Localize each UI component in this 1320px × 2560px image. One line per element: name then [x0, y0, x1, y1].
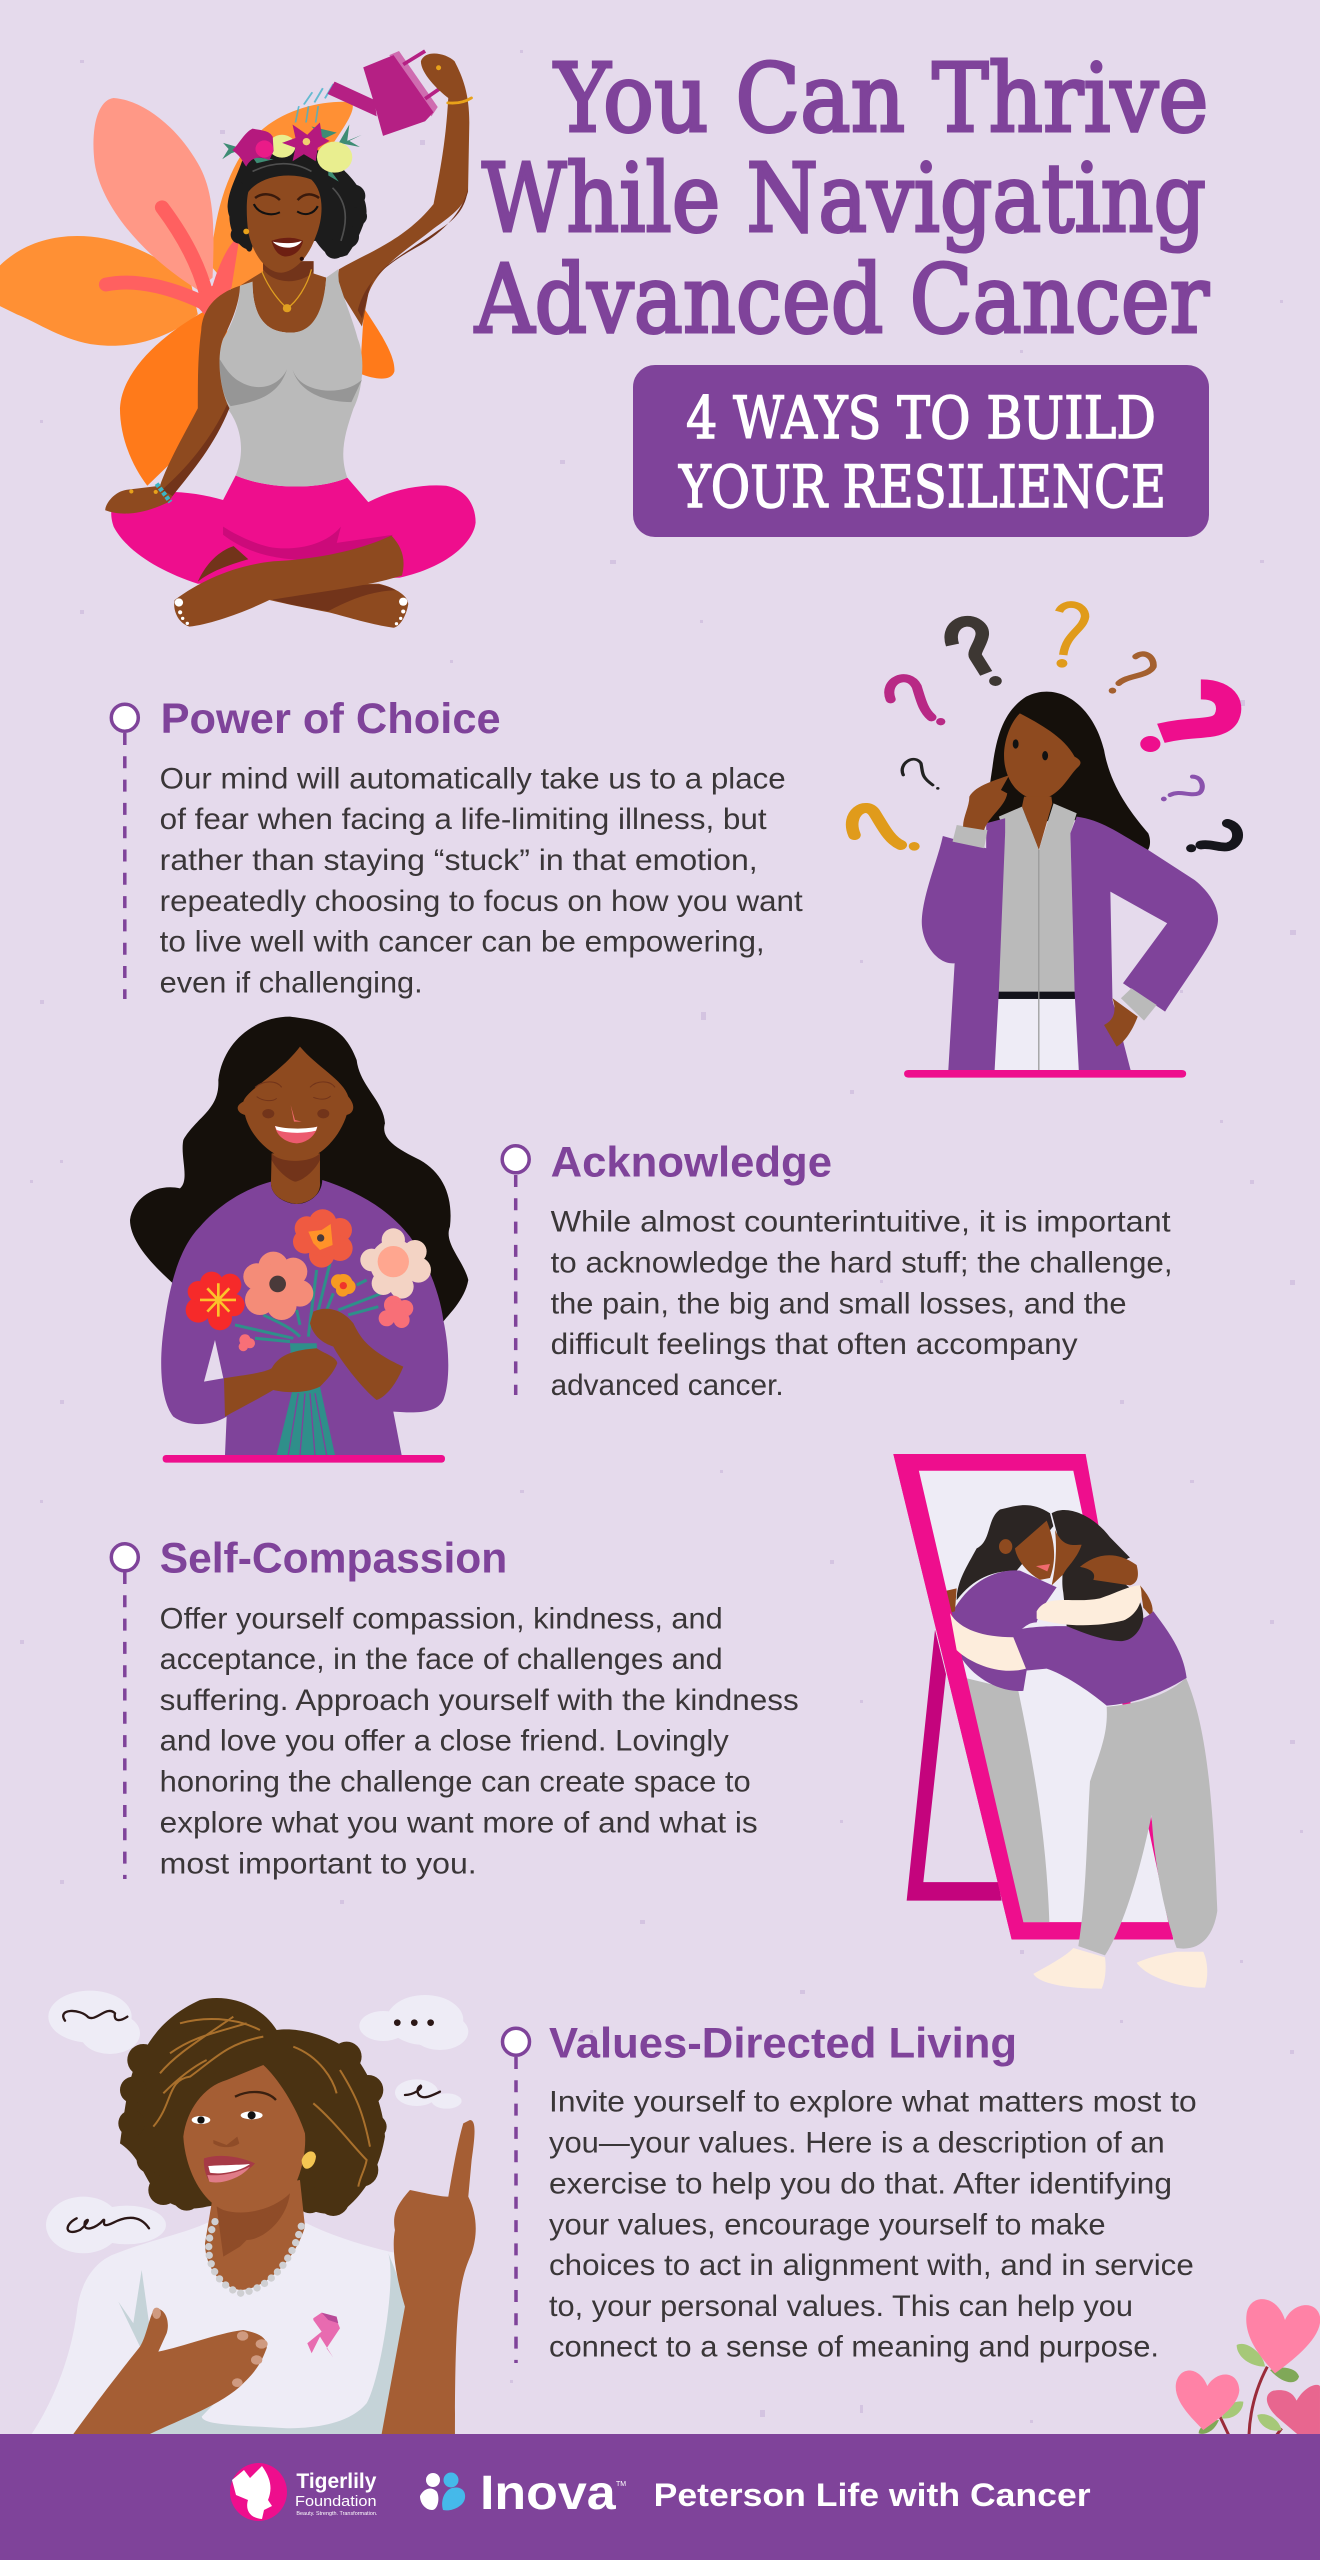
logo: Inova: Inova: [480, 2467, 616, 2520]
body text: to live well with cancer can be empowering,: [160, 926, 765, 959]
illustration: woman holding bouquet: [130, 1017, 468, 1463]
body text: exercise to help you do that. After identifying: [549, 2167, 1172, 2200]
body text: [160, 762, 803, 999]
logo: Tigerlily Foundation: [230, 2463, 377, 2521]
figure: [922, 692, 1218, 1070]
body text: advanced cancer.: [551, 1369, 784, 1402]
body text: Offer yourself compassion, kindness, and: [160, 1602, 723, 1635]
panel: self-compassion: [111, 1535, 799, 1880]
body text: While almost counterintuitive, it is important: [551, 1206, 1171, 1239]
body text: connect to a sense of meaning and purpose.: [549, 2331, 1159, 2364]
body text: rather than staying “stuck” in that emotion,: [160, 844, 758, 877]
logo: Tigerlily Foundation: Beauty. Strength. Transformation.: [296, 2511, 377, 2517]
body text: even if challenging.: [160, 966, 423, 999]
subtitle badge: YOUR RESILIENCE: [678, 453, 1166, 521]
base line: [904, 1070, 1186, 1078]
logo: Tigerlily Foundation: Tigerlily: [296, 2470, 377, 2493]
reflection: [945, 1505, 1057, 1922]
neck and pearl necklace: [205, 2180, 305, 2293]
sweater: [161, 1180, 448, 1455]
logo: Tigerlily Foundation: Foundation: [295, 2493, 376, 2510]
panel: acknowledge: [502, 1139, 1173, 1402]
bouquet stems: [235, 1263, 382, 1455]
body text: Invite yourself to explore what matters most to: [549, 2086, 1197, 2119]
body text: Our mind will automatically take us to a place: [160, 762, 786, 795]
flowers: [186, 1209, 431, 1351]
face: [183, 2065, 316, 2213]
title: While Navigating: [482, 144, 1206, 254]
tank top and torso: [219, 261, 362, 487]
flower crown: [222, 122, 362, 182]
raised arm: [337, 54, 471, 327]
panel: power of choice: [111, 695, 803, 999]
body text: the pain, the big and small losses, and the: [551, 1287, 1127, 1320]
body text: to, your personal values. This can help you: [549, 2290, 1133, 2323]
body text: and love you offer a close friend. Lovingly: [160, 1725, 729, 1758]
logo: Inova: TM: [616, 2481, 626, 2488]
body text: your values, encourage yourself to make: [549, 2208, 1106, 2241]
timeline marker: [111, 1544, 138, 1879]
timeline marker: [111, 704, 138, 999]
left arm with bracelets: [105, 286, 240, 514]
neck and face: [238, 1047, 353, 1204]
base line: [163, 1455, 445, 1463]
title: Advanced Cancer: [474, 245, 1210, 355]
body text: difficult feelings that often accompany: [551, 1328, 1078, 1361]
logo: Peterson Life with Cancer: Peterson Life with Cancer: [654, 2477, 1091, 2513]
hair: [130, 1017, 468, 1322]
subtitle badge: 4 WAYS TO BUILD: [686, 384, 1156, 452]
logo: Inova: [420, 2467, 626, 2520]
hands: [224, 1309, 403, 1417]
shoes: [1033, 1948, 1207, 1989]
timeline marker: [502, 2028, 530, 2363]
timeline marker: [502, 1146, 529, 1395]
body text: explore what you want more of and what is: [160, 1806, 758, 1839]
panel: values-directed living: [502, 2019, 1197, 2364]
heading: Self-Compassion: [160, 1535, 507, 1583]
body text: repeatedly choosing to focus on how you want: [160, 885, 803, 918]
hand on chest: [73, 2308, 268, 2434]
hero illustration: woman watering flower crown: [0, 51, 476, 628]
body text: most important to you.: [160, 1847, 477, 1880]
heading: Power of Choice: [161, 695, 501, 743]
watering can: [295, 51, 447, 136]
mirror left rail: [893, 1454, 1023, 1939]
body text: [551, 1206, 1173, 1402]
crossed legs and feet: [174, 536, 408, 628]
body text: [549, 2086, 1197, 2364]
heading: Values-Directed Living: [549, 2019, 1017, 2067]
illustration: woman hugging reflection in mirror: [893, 1454, 1217, 1989]
hugging person: [950, 1510, 1217, 1955]
shirt: [32, 2220, 407, 2434]
footer bar: [0, 2434, 1320, 2560]
thought clouds: [46, 1991, 468, 2253]
icon: heart plants: [1176, 2299, 1320, 2435]
body text: you—your values. Here is a description of an: [549, 2127, 1165, 2160]
pointing hand: [382, 2120, 476, 2434]
head with curly hair: [228, 144, 367, 273]
body text: suffering. Approach yourself with the kindness: [160, 1684, 799, 1717]
title: [474, 44, 1210, 355]
subtitle badge: [633, 365, 1209, 537]
scribbles: [63, 2011, 440, 2232]
illustration: woman thinking with question marks: [852, 605, 1238, 1078]
question marks: [852, 605, 1238, 852]
body text: of fear when facing a life-limiting illness, but: [160, 803, 767, 836]
icon: awareness ribbon: [307, 2313, 340, 2358]
heading: Acknowledge: [551, 1139, 832, 1187]
body text: to acknowledge the hard stuff; the challenge,: [551, 1247, 1173, 1280]
illustration: smiling woman with speech clouds: [32, 1991, 476, 2434]
body text: honoring the challenge can create space to: [160, 1766, 751, 1799]
hair: [118, 1998, 387, 2216]
body text: acceptance, in the face of challenges and: [160, 1643, 723, 1676]
title: You Can Thrive: [553, 44, 1208, 154]
mirror frame: [893, 1454, 1173, 1939]
icon: flower petals behind figure: [0, 98, 394, 486]
pants: [111, 476, 476, 584]
body text: [160, 1602, 799, 1880]
body text: choices to act in alignment with, and in service: [549, 2249, 1194, 2282]
